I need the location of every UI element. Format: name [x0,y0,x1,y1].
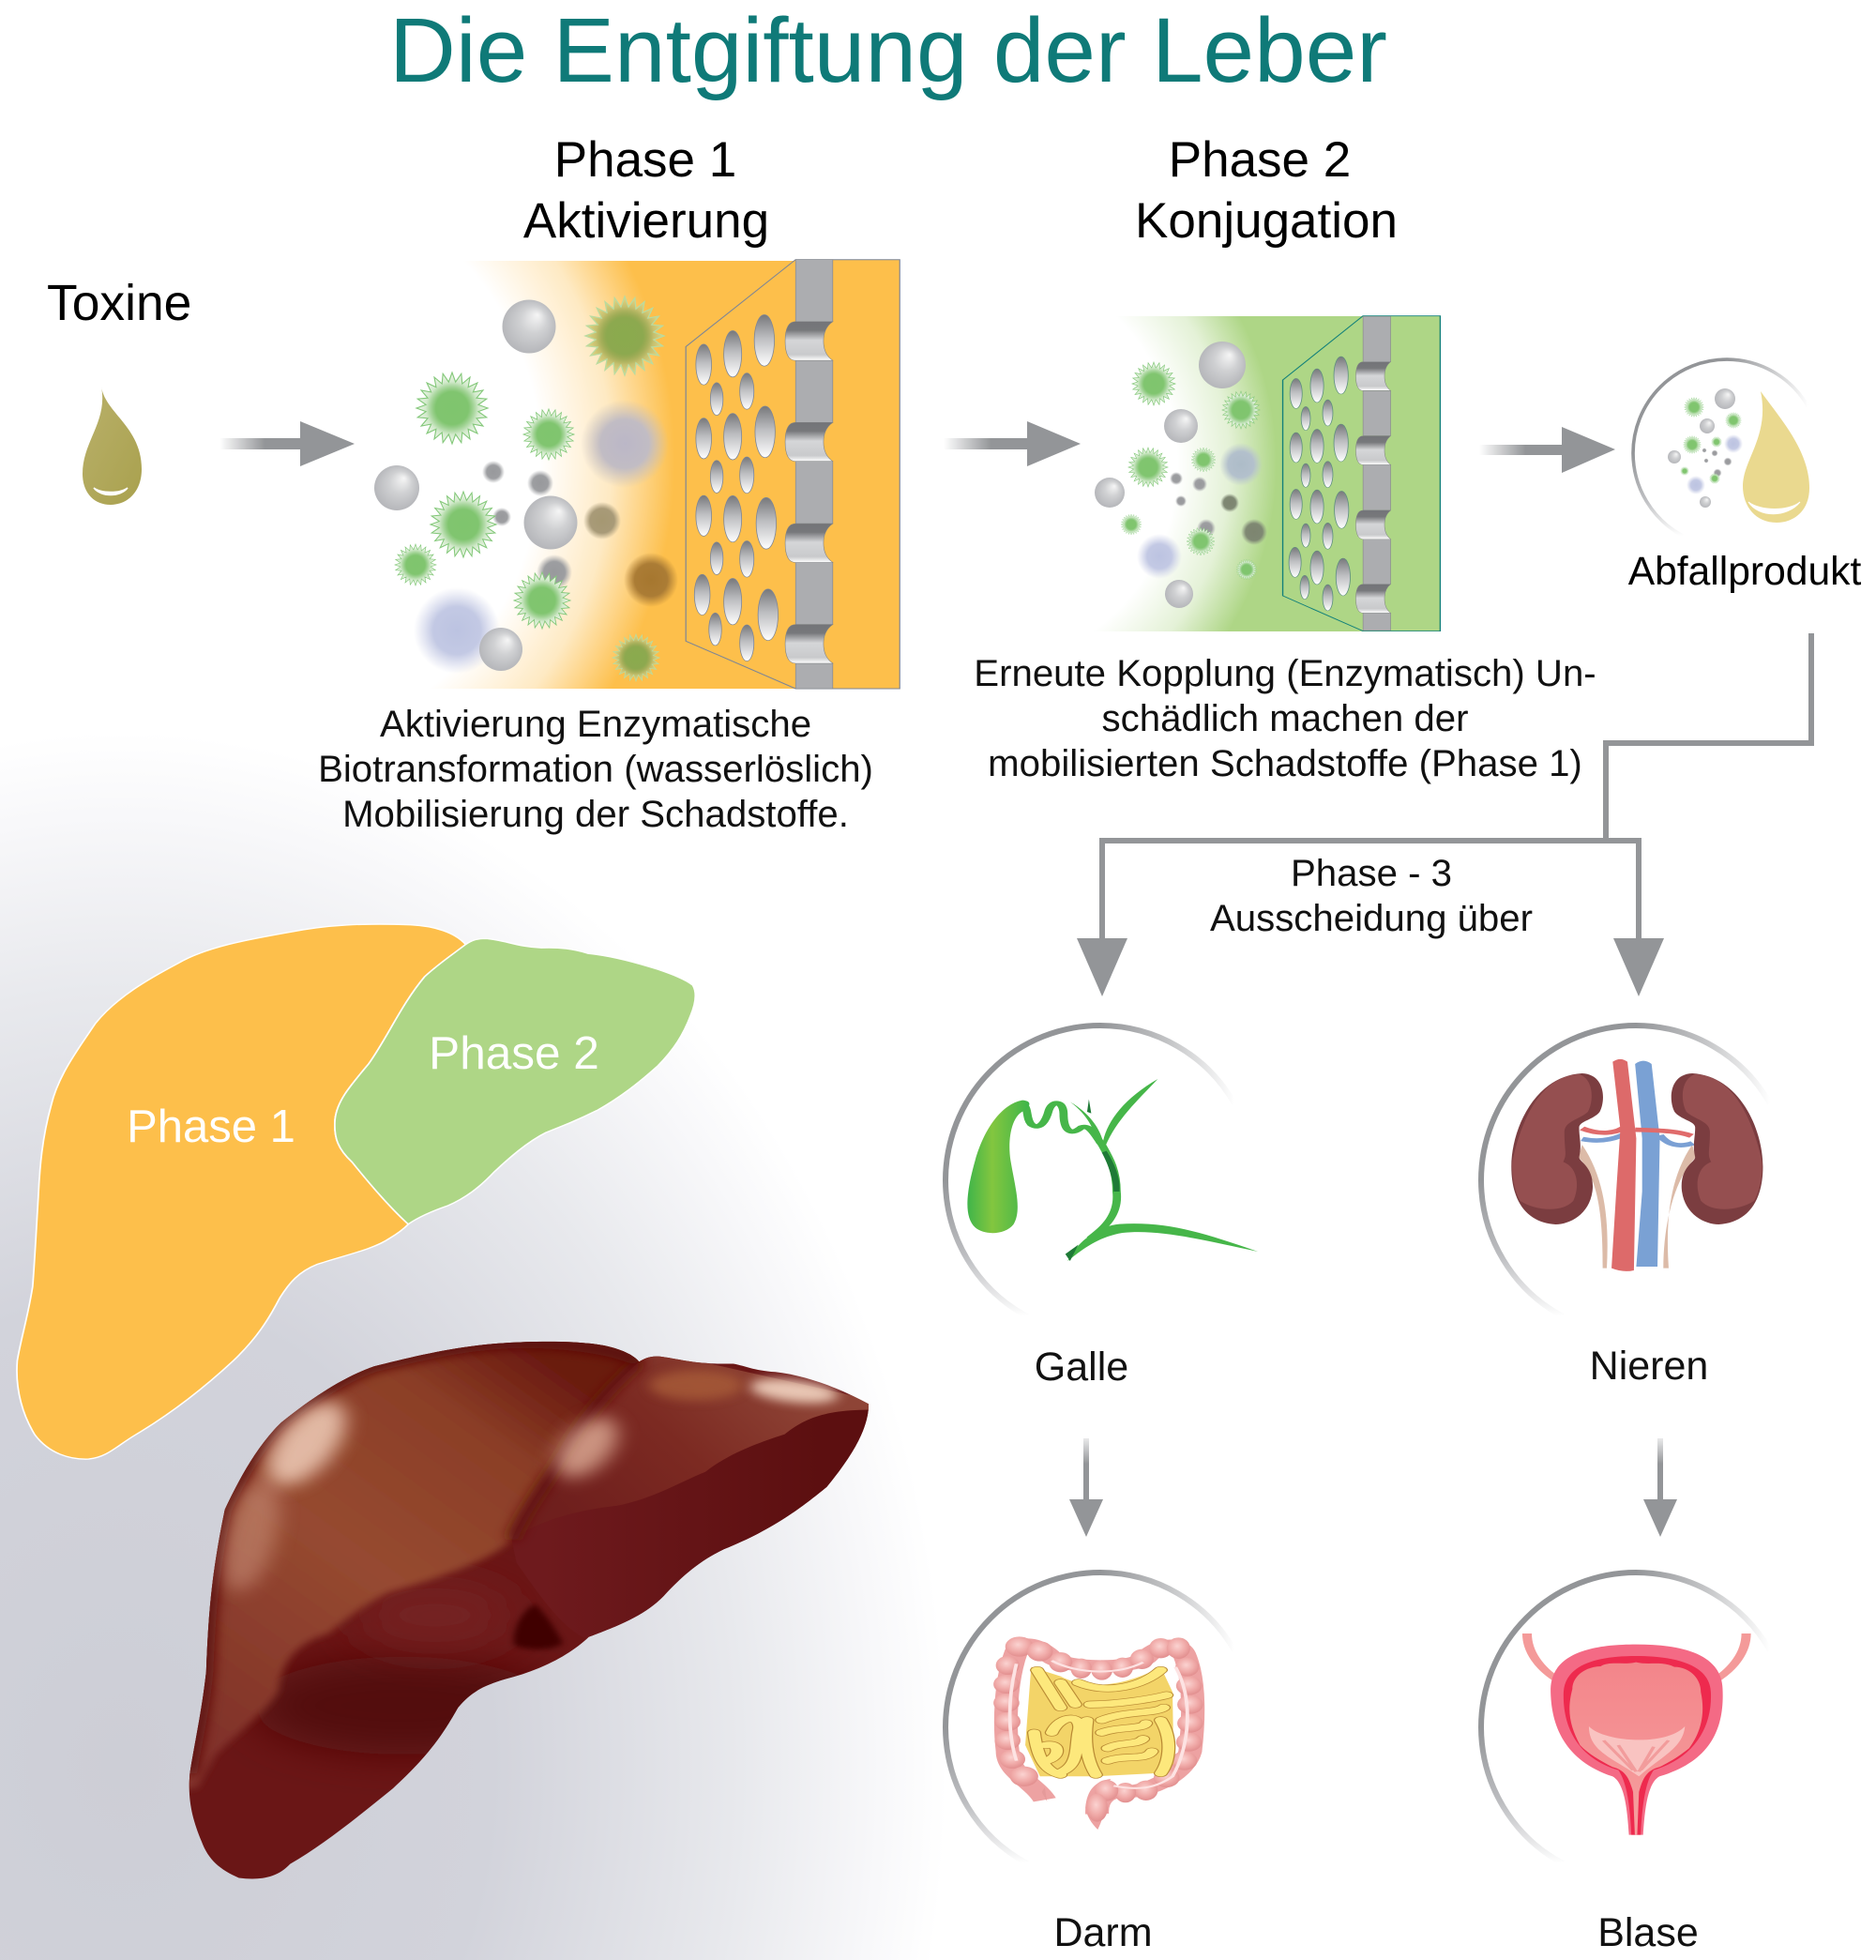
label: Nieren: Nieren [1590,1344,1708,1389]
lower dark band [253,1657,552,1755]
ureters [1527,1633,1560,1681]
right lobe upper [535,1357,869,1527]
icon: waste product circle [1633,359,1809,536]
caudate lobe [379,1588,492,1653]
fissure shadow [512,1361,639,1540]
diagram: liver phases [17,924,695,1459]
arrow: gall to intestine [1069,1438,1103,1537]
arrow: phase 2 to waste [1479,427,1615,473]
label: Phase 2 on liver: Phase 2 [429,1027,599,1079]
waste drop [1743,391,1809,523]
highlights [251,1391,362,1496]
large intestine [1006,1645,1193,1814]
toxin spheres [374,300,578,671]
text: phase 1 description: Mobilisierung der Schadstoffe. [342,793,849,835]
arrow: phase 1 to phase 2 [944,421,1081,466]
heading: Phase 1 [523,132,769,249]
liver base [189,1342,869,1878]
text: phase 1 description: Biotransformation (wasserlöslich) [318,748,873,790]
orange gradient field [446,261,794,689]
arrow: kidney to bladder [1643,1438,1677,1537]
toxin spheres [1095,342,1246,608]
text: phase 3: Ausscheidung über [1210,897,1533,939]
label: Abfallprodukt: Abfallprodukt [1628,549,1861,594]
trigone [1589,1726,1685,1776]
phase 1 lobe [17,924,465,1459]
text: phase 1 description: Aktivierung Enzymatische [380,703,811,745]
title: Die Entgiftung der Leber [389,0,1387,101]
ureters [1579,1145,1608,1269]
bladder lumen [1569,1663,1702,1835]
icon: gallbladder [946,1026,1258,1316]
renal veins [1582,1131,1632,1141]
label: Blase: Blase [1597,1910,1699,1955]
text: phase 3 [1210,852,1533,939]
heading: Phase 1: Phase 1 [554,132,736,188]
membrane plate [1283,316,1440,631]
icon: bladder [1481,1573,1770,1863]
hilum shadow [514,1603,563,1649]
diffuse particles [414,400,678,674]
bladder muscle [1564,1656,1711,1835]
diffuse particles [1137,443,1267,579]
membrane plate [686,260,900,689]
gallbladder sac [967,1101,1029,1233]
text: phase 2 description: mobilisierten Schadstoffe (Phase 1) [988,742,1582,784]
text: phase 2 description: schädlich machen der [1102,697,1468,739]
renal arteries [1582,1126,1626,1132]
right lobe lower [589,1409,869,1636]
illustration: liver [189,1342,869,1878]
kidney right [1672,1073,1763,1224]
green gradient field [1111,316,1363,631]
kidney left [1511,1073,1603,1224]
arrow: toxin to phase 1 [219,421,355,466]
label: Phase 1 on liver: Phase 1 [127,1102,295,1152]
bile ducts [1017,1103,1117,1238]
panel: phase 2 membrane [1060,316,1440,631]
vena cava [1635,1061,1660,1267]
heading: Phase 1: Aktivierung [523,193,769,249]
edge shadow [189,1343,639,1773]
spiky toxins [1121,362,1260,580]
bladder wall [1551,1645,1723,1835]
heading: Phase 2: Konjugation [1135,193,1398,249]
label: Toxine: Toxine [47,276,191,331]
small intestine [1025,1667,1173,1776]
heading: Phase 2 [1135,132,1398,249]
phase 2 lobe [335,938,695,1224]
icon: kidneys [1481,1026,1770,1316]
waste particles [1724,434,1743,453]
panel: phase 1 membrane [374,260,900,689]
text: phase 3: Phase - 3 [1291,852,1452,894]
text: phase 2 description: Erneute Kopplung (Enzymatisch) Un- [974,652,1596,694]
text: phase 2 description [974,652,1596,784]
icon: intestine [946,1573,1234,1863]
heading: Phase 2: Phase 2 [1169,132,1351,188]
left lobe [169,1314,639,1788]
spiky toxins [395,296,664,681]
text: phase 1 description [318,703,873,835]
aorta [1611,1059,1636,1271]
icon: toxin drop [83,387,142,505]
label: Galle: Galle [1035,1345,1128,1390]
connector arrows: waste to phase 3 [1077,633,1811,996]
label: Darm: Darm [1053,1910,1153,1955]
